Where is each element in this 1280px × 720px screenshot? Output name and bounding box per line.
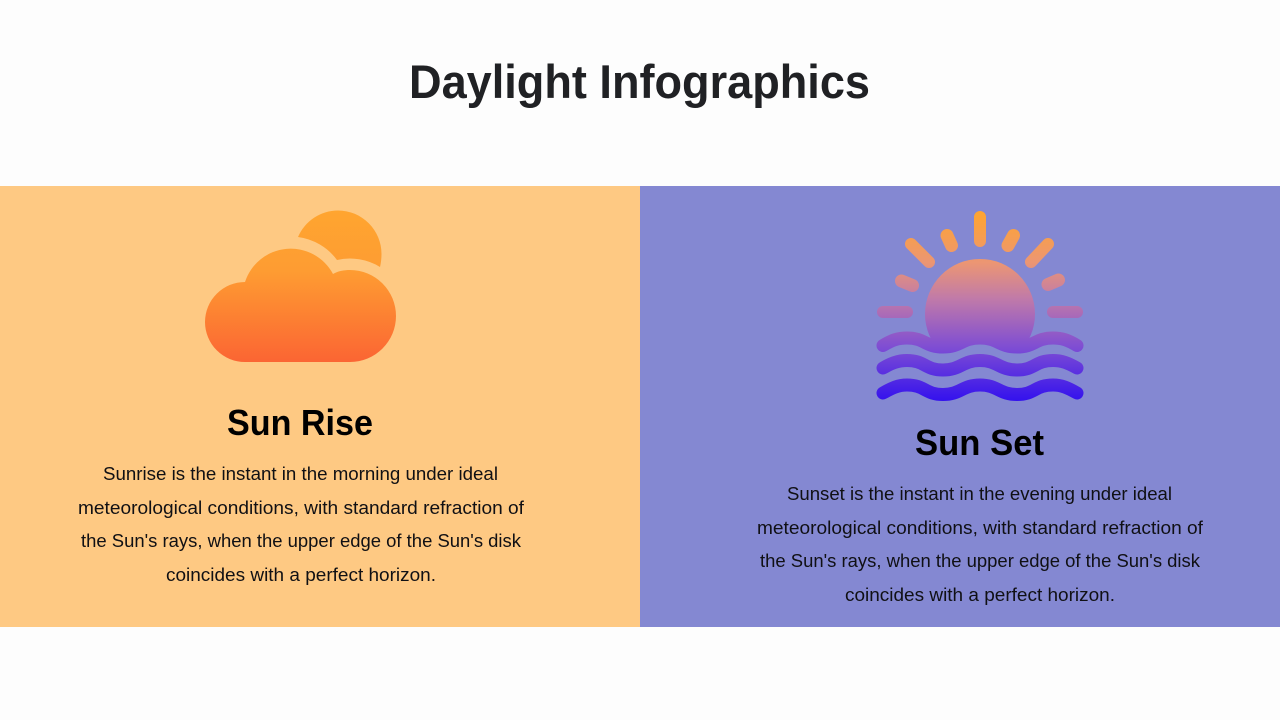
- text block: sunrise description: meteorological conditions, with standard refraction of: [78, 497, 525, 518]
- panel: sun rise: [0, 186, 640, 627]
- icon: sun setting over water: [883, 217, 1077, 394]
- waves: [883, 338, 1077, 394]
- text block: sunrise description: coincides with a perfect horizon.: [166, 564, 436, 585]
- icon: sun behind cloud: [205, 210, 396, 362]
- text block: sunset description: meteorological conditions, with standard refraction of: [757, 517, 1204, 538]
- heading: sun rise: Sun Rise: [227, 402, 373, 443]
- title: Daylight Infographics: [409, 55, 870, 108]
- long sun rays: [883, 217, 1077, 312]
- text block: sunset description: coincides with a perfect horizon.: [845, 584, 1115, 605]
- short sun rays: [902, 236, 1058, 286]
- heading: sun set: Sun Set: [915, 422, 1044, 463]
- text block: sunrise description: the Sun's rays, when the upper edge of the Sun's disk: [81, 530, 522, 551]
- text block: sunrise description: [78, 463, 525, 585]
- text block: sunset description: the Sun's rays, when the upper edge of the Sun's disk: [760, 550, 1201, 571]
- text block: sunset description: Sunset is the instant in the evening under ideal: [787, 483, 1172, 504]
- sun disk: [925, 259, 1035, 340]
- text block: sunset description: [757, 483, 1204, 605]
- panel: sun set: [640, 186, 1280, 627]
- text block: sunrise description: Sunrise is the instant in the morning under ideal: [103, 463, 498, 484]
